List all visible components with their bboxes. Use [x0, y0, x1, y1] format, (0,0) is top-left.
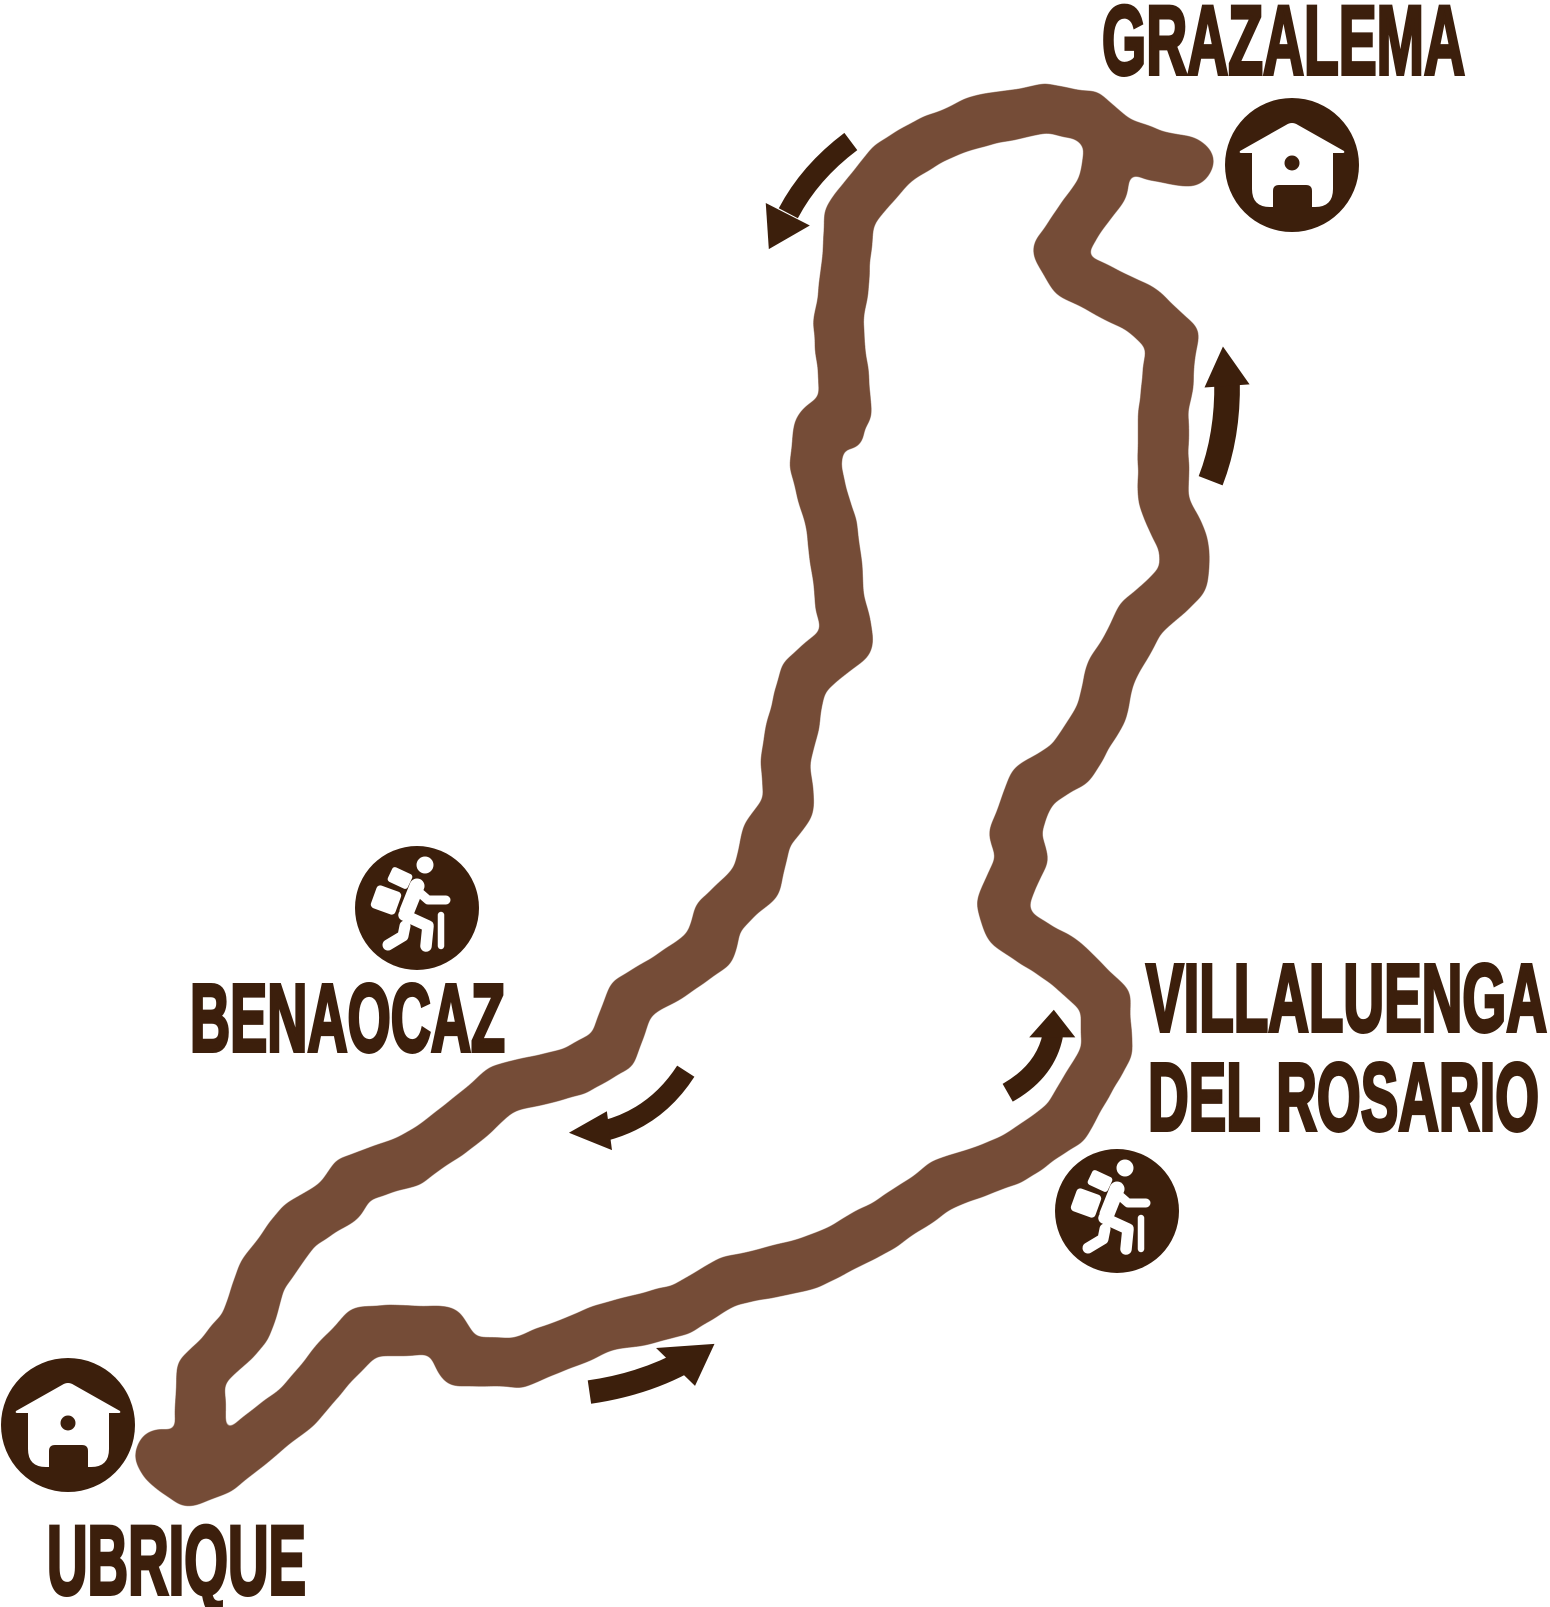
route: hiking loop trail — [162, 109, 1189, 1481]
direction arrows — [569, 141, 1250, 1392]
icon: hiker at Benaocaz — [355, 846, 479, 970]
label: Benaocaz: BENAOCAZ — [190, 965, 505, 1072]
icon: hiker at Villaluenga — [1055, 1149, 1179, 1273]
arrow: towards Villaluenga — [1008, 1010, 1075, 1093]
arrow: towards Benaocaz from Grazalema — [766, 141, 851, 249]
arrow: towards Ubrique — [569, 1071, 686, 1150]
label: Villaluenga del Rosario — [1146, 945, 1547, 1151]
arrow: from Ubrique — [589, 1344, 714, 1392]
arrow: towards Grazalema — [1204, 346, 1250, 481]
icon: house at Grazalema — [1225, 98, 1359, 232]
icon: house at Ubrique — [1, 1358, 135, 1492]
